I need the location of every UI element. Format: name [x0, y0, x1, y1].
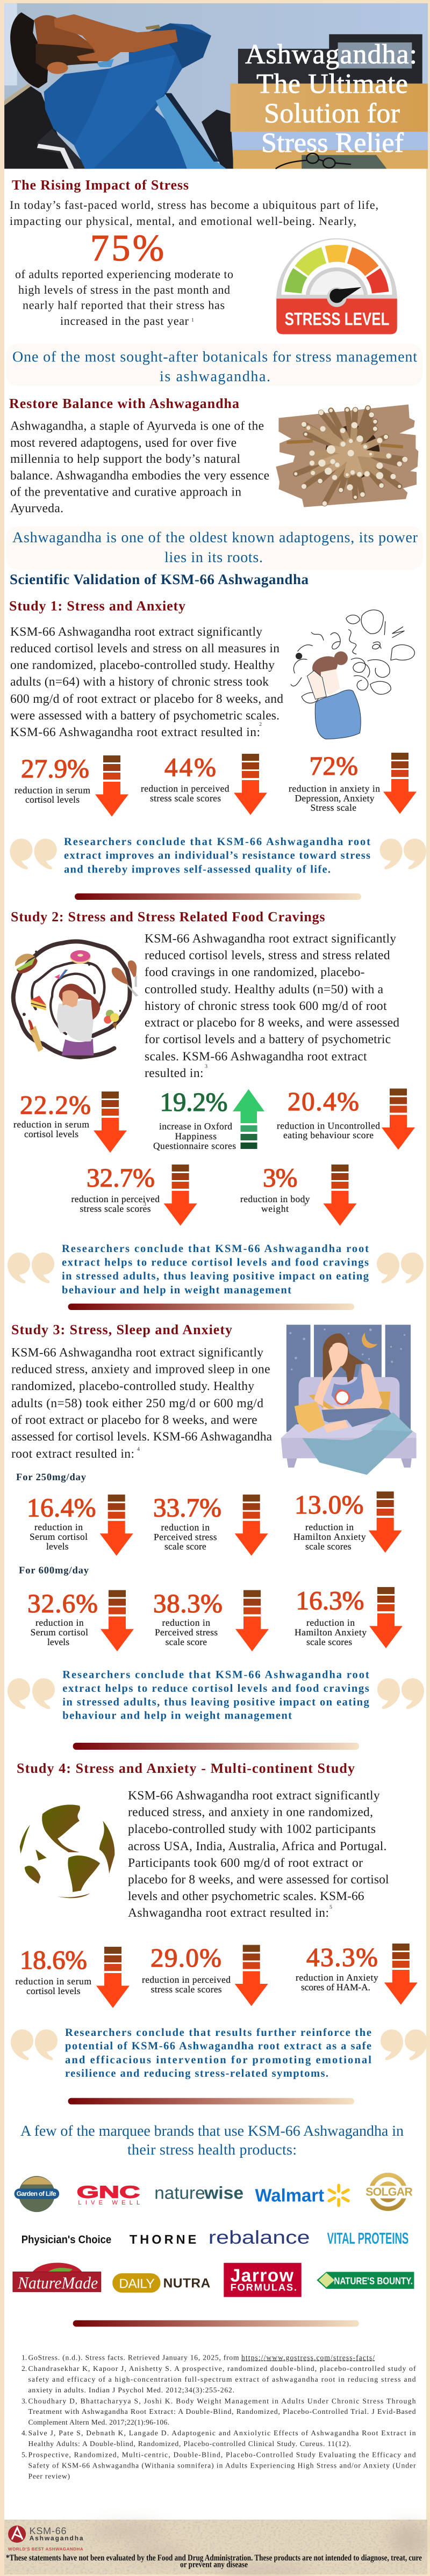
- study 1 text: one randomized, placebo-controlled study. Healthy: [10, 658, 275, 672]
- study 1 text: adults (n=64) with a history of chronic stress took: [10, 675, 269, 689]
- label: reduction in: [306, 1617, 355, 1628]
- label: Perceived stress: [154, 1531, 217, 1542]
- stat: 29.0%: 29.0%: [150, 1943, 221, 1973]
- heading: scientific validation: Scientific Validation of KSM-66 Ashwagandha: [10, 571, 309, 587]
- intro text: In today’s fast-paced world, stress has become a ubiquitous part of life,: [10, 198, 378, 212]
- stat: 16.3%: 16.3%: [296, 1586, 364, 1615]
- quote: study 4 conclusion: potential of KSM-66 Ashwagandha root extract as a safe: [65, 2040, 371, 2052]
- callout: oldest adaptogens: Ashwagandha is one of the oldest known adaptogens, its power: [12, 529, 418, 546]
- stat: 16.3%: [295, 1586, 403, 1648]
- quote: study 3 conclusion: behaviour and help in weight management: [62, 1709, 292, 1721]
- disclaimer: [6, 2553, 422, 2570]
- study 3 text: of root extract or placebo for 8 weeks, and were: [11, 1413, 257, 1427]
- logo: Nature Made: NatureMade: [18, 2274, 98, 2293]
- logo: Solgar: [366, 2175, 413, 2209]
- title: Solution for: [264, 98, 400, 129]
- title: The Ultimate: [256, 69, 408, 99]
- restore balance text: most revered adaptogens, used for over five: [10, 436, 236, 450]
- study 1 text: KSM-66 Ashwagandha root extract resulted in:: [10, 725, 260, 739]
- label: stress scale scores: [80, 1203, 151, 1214]
- label: Serum cortisol: [30, 1531, 88, 1542]
- heading: restore balance: Restore Balance with Ashwagandha: [9, 396, 239, 411]
- logo: GNC: LIVE WELL: [78, 2199, 140, 2206]
- stat description: of adults reported experiencing moderate to: [15, 267, 233, 281]
- restore balance text: of the preventative and curative approach in: [10, 485, 241, 499]
- study 1 text: [10, 625, 283, 739]
- study 3 text: root extract resulted in:: [11, 1447, 134, 1461]
- stat: 38.3%: [153, 1589, 269, 1651]
- heading: study 2: Study 2: Stress and Stress Related Food Cravings: [11, 909, 325, 925]
- quote: study 1 conclusion: [10, 836, 426, 875]
- logo: KSM-66 Ashwagandha: KSM-66: [30, 2526, 67, 2536]
- label: 250 mg/day: For 250mg/day: [16, 1472, 87, 1483]
- label: Hamilton Anxiety: [295, 1627, 367, 1638]
- study 2 text: KSM-66 Ashwagandha root extract significantly: [145, 932, 396, 946]
- restore balance text: millennia to help support the body’s natural: [10, 452, 240, 466]
- title: Stress Relief: [261, 128, 404, 158]
- references: 1.: [22, 2353, 27, 2361]
- icon: down arrow: [384, 1944, 418, 2005]
- label: reduction in: [35, 1617, 84, 1628]
- icon: down arrow: [324, 1165, 357, 1226]
- study 3 text: randomized, placebo-controlled study. Healthy: [11, 1379, 254, 1393]
- study 2 text: for cortisol levels and a battery of psychometric: [145, 1032, 391, 1046]
- references: Complement Altern Med. 2017;22(1):96-106.: [28, 2418, 169, 2426]
- stat: 43.3%: [296, 1942, 418, 2005]
- stat: 13.0%: 13.0%: [295, 1490, 363, 1519]
- study 4 text: levels and other psychometric scales. KSM-66: [128, 1889, 364, 1903]
- stat: 16.4%: 16.4%: [27, 1493, 96, 1523]
- study 1 text: 2: [259, 722, 262, 727]
- logo: Daily Nutra: NUTRA: [163, 2276, 210, 2290]
- quote: study 3 conclusion: Researchers conclude that KSM-66 Ashwagandha root: [62, 1669, 369, 1680]
- heading: marquee brands: their stress health products:: [127, 2142, 297, 2158]
- chicken drumsticks: [112, 967, 128, 985]
- quote: study 3 conclusion: [8, 1669, 424, 1721]
- label: reduction in serum: [13, 1119, 89, 1130]
- study 1 text: 600 mg/d of root extract or placebo for 8 weeks, and: [10, 692, 283, 706]
- references: Safety of KSM-66 Ashwagandha (Withania somnifera) in Adults Experiencing High Stress and/or Anxiety (Under: [28, 2461, 416, 2469]
- logo: naturewise: nature: [154, 2183, 205, 2203]
- quote: study 4 conclusion: and efficacious intervention for promoting emotional: [65, 2054, 371, 2066]
- illustration: sleepless woman in bed: [281, 1325, 417, 1475]
- study 4 text: across USA, India, Australia, Africa and Portugal.: [128, 1839, 386, 1853]
- label: reduction in Anxiety: [296, 1972, 378, 1983]
- quote: study 3 conclusion: extract helps to reduce cortisol levels and food cravings: [62, 1683, 369, 1694]
- stat: 18.6%: [15, 1945, 130, 2008]
- label: [15, 1976, 91, 1996]
- callout: oldest adaptogens: lies in its roots.: [164, 549, 263, 566]
- study 2 text: food cravings in one randomized, placebo-: [145, 965, 364, 979]
- label: levels: [46, 1541, 69, 1552]
- logo: Nature's Bounty: [317, 2272, 414, 2289]
- study 2 text: controlled study. Healthy adults (n=50) with a: [145, 983, 384, 996]
- study 3 text: [11, 1345, 273, 1461]
- label: 3: [303, 1202, 306, 1207]
- label: reduction in: [34, 1522, 83, 1532]
- stat: 20.4%: 20.4%: [288, 1087, 359, 1116]
- logo: Nature's Bounty: NATURE'S BOUNTY.: [334, 2275, 413, 2287]
- references: https://www.gostress.com/stress-facts/: [241, 2353, 375, 2361]
- label: reduction in: [305, 1522, 354, 1532]
- study 2 text: [145, 932, 399, 1080]
- big stat: 75%: 75%: [90, 228, 164, 269]
- quote: study 2 conclusion: behaviour and help in weight management: [62, 1284, 291, 1296]
- study 3 text: KSM-66 Ashwagandha root extract significantly: [11, 1345, 263, 1359]
- label: cortisol levels: [26, 1985, 81, 1996]
- logo: KSM-66 Ashwagandha: Ashwagandha: [30, 2535, 83, 2542]
- stat description: 1: [191, 317, 194, 323]
- study 4 text: [128, 1789, 389, 1920]
- label: increase in Oxford: [159, 1121, 232, 1132]
- label: [71, 1194, 160, 1214]
- label: [293, 1522, 366, 1552]
- study 4 text: placebo-controlled study with 1002 participants: [128, 1822, 376, 1836]
- quote: study 4 conclusion: [11, 2027, 427, 2079]
- label: [154, 1522, 217, 1552]
- references: Chandrasekhar K, Kapoor J, Anishetty S. A prospective, randomized double-blind, placebo-controlled study of: [28, 2364, 416, 2373]
- callout: sought-after botanical: [6, 344, 422, 386]
- stat: 19.2%: 19.2%: [160, 1087, 228, 1117]
- icon: down arrow: [369, 1587, 403, 1648]
- quote: study 3 conclusion: in stressed adults, thus leaving positive impact on eating: [62, 1697, 369, 1708]
- icon: down arrow: [164, 1165, 197, 1226]
- references: [22, 2353, 416, 2480]
- hero photo: stressed man at desk: [4, 3, 428, 169]
- stat: 44%: 44%: [164, 753, 216, 782]
- logo: Garden of Life: Garden of Life: [17, 2190, 56, 2197]
- label: reduction in: [162, 1617, 210, 1628]
- quote: study 4 conclusion: Researchers conclude that results further reinforce the: [65, 2027, 371, 2039]
- logo: Garden of Life: [15, 2176, 59, 2212]
- stat: 27.9%: 27.9%: [21, 754, 89, 783]
- label: cortisol levels: [24, 1129, 78, 1139]
- stat: 3%: 3%: [263, 1163, 298, 1192]
- references: Choudhary D, Bhattacharyya S, Joshi K. Body Weight Management in Adults Under Chronic Stress Through: [28, 2397, 416, 2405]
- logo: Daily Nutra: DAILY: [119, 2276, 155, 2291]
- label: Happiness: [175, 1131, 217, 1141]
- quote: study 4 conclusion: resilience and reducing stress-related symptoms.: [65, 2068, 328, 2079]
- quote: study 2 conclusion: [8, 1243, 424, 1296]
- references: 3.: [22, 2397, 27, 2405]
- quote: study 1 conclusion: Researchers conclude that KSM-66 Ashwagandha root: [64, 836, 370, 848]
- label: cortisol levels: [25, 794, 80, 805]
- references: Peer review): [28, 2472, 70, 2480]
- brand logos: [13, 2175, 414, 2297]
- icon: down arrow: [383, 753, 417, 814]
- label: [15, 785, 90, 805]
- label: [240, 1194, 310, 1214]
- label: reduction in perceived: [71, 1194, 160, 1204]
- references: anxiety in adults. Indian J Psychol Med. 2012;34(3):255-262.: [28, 2386, 234, 2394]
- study 3 text: reduced stress, anxiety and improved sleep in one: [11, 1363, 270, 1377]
- label: [289, 783, 380, 813]
- heading: the rising impact of stress: The Rising Impact of Stress: [12, 177, 189, 193]
- label: reduction in: [161, 1522, 210, 1532]
- illustration: globe: [20, 1804, 114, 1898]
- study 2 text: resulted in:: [145, 1066, 203, 1080]
- stat: 29.0%: [142, 1943, 268, 2006]
- label: Stress scale: [311, 802, 356, 813]
- stat: 18.6%: 18.6%: [20, 1945, 87, 1975]
- heading: marquee brands: A few of the marquee brands that use KSM-66 Ashwagandha in: [20, 2123, 404, 2140]
- logo: naturewise: [154, 2183, 243, 2203]
- logo: Walmart: Walmart: [255, 2185, 324, 2205]
- label: [277, 1120, 380, 1140]
- intro text: [10, 198, 378, 228]
- stat: 32.7%: [71, 1163, 197, 1226]
- study 4 text: placebo for 8 weeks, and were assessed for cortisol: [128, 1873, 389, 1887]
- disclaimer: or prevent any disease: [180, 2560, 248, 2570]
- icon: down arrow: [235, 1495, 268, 1556]
- study 3 text: 4: [137, 1446, 140, 1452]
- label: stress scale scores: [150, 792, 221, 803]
- quote: study 2 conclusion: Researchers conclude that KSM-66 Ashwagandha root: [62, 1243, 369, 1255]
- label: reduction in Uncontrolled: [277, 1120, 380, 1131]
- restore balance text: balance. Ashwagandha embodies the very essence: [10, 469, 269, 483]
- stat description: increased in the past year: [60, 314, 189, 328]
- label: [153, 1121, 236, 1151]
- label: Serum cortisol: [31, 1627, 88, 1638]
- logo: Nature Made: [13, 2263, 101, 2293]
- study 1 text: were assessed with a battery of psychometric scales.: [10, 709, 280, 723]
- hero banner: [4, 3, 428, 169]
- restore balance text: Ashwagandha, a staple of Ayurveda is one of the: [10, 419, 264, 433]
- label: levels: [47, 1636, 69, 1647]
- label: scale scores: [305, 1541, 352, 1552]
- quote: study 2 conclusion: extract helps to reduce cortisol levels and food cravings: [62, 1257, 369, 1269]
- heading: study 4: Study 4: Stress and Anxiety - Multi-continent Study: [17, 1760, 355, 1776]
- icon: down arrow: [369, 1491, 402, 1553]
- study 1 text: reduced cortisol levels and stress on all measures in: [10, 642, 280, 656]
- logo: Physician's Choice: Physician's Choice: [22, 2233, 111, 2246]
- woman: [62, 1038, 94, 1056]
- hot dog: [29, 1026, 43, 1052]
- references: GoStress. (n.d.). Stress facts. Retrieved January 16, 2025, from: [28, 2353, 239, 2361]
- study 2 text: extract or placebo for 8 weeks, and were assessed: [145, 1016, 399, 1030]
- stat: 32.6%: 32.6%: [27, 1589, 98, 1618]
- label: scale score: [166, 1636, 207, 1647]
- callout: sought-after botanical: is ashwagandha.: [160, 368, 270, 385]
- study 2 text: 3: [205, 1064, 207, 1069]
- restore balance text: [10, 419, 269, 515]
- stat: 32.6%: [27, 1589, 134, 1651]
- label: [142, 1974, 231, 1995]
- heading: marquee brands: [20, 2123, 404, 2158]
- study 2 text: history of chronic stress took 600 mg/d of root: [145, 999, 387, 1013]
- label: reduction in body: [240, 1194, 310, 1204]
- icon: down arrow: [94, 1091, 127, 1153]
- stat description: [15, 267, 233, 328]
- logo: Jarrow Formulas: [224, 2263, 302, 2297]
- references: 2.: [22, 2364, 27, 2373]
- stat: 16.4%: [27, 1493, 133, 1556]
- icon: down arrow: [235, 1945, 268, 2006]
- icon: down arrow: [100, 1495, 133, 1556]
- references: Healthy Adults: A Double-blind, Randomized, Placebo-controlled Clinical Study. Cureus. 11(12).: [28, 2440, 351, 2448]
- intro text: impacting our physical, mental, and emotional well-being. Nearly,: [10, 214, 356, 228]
- label: [141, 783, 230, 803]
- illustration: woman in food spiral: [13, 941, 138, 1057]
- label: reduction in serum: [15, 785, 90, 796]
- stat: 13.0%: [293, 1490, 402, 1553]
- restore balance text: Ayurveda.: [10, 501, 63, 515]
- label: 600 mg/day: For 600mg/day: [19, 1566, 89, 1576]
- references: Prospective, Randomized, Multi-centric, Double-Blind, Placebo-Controlled Study Evaluating the Efficacy and: [28, 2451, 416, 2459]
- stat: 19.2%: [153, 1087, 264, 1151]
- references: safety and efficacy of a high-concentration full-spectrum extract of ashwagandha root in reducing stress and: [28, 2375, 416, 2383]
- quote: study 2 conclusion: in stressed adults, thus leaving positive impact on eating: [62, 1270, 369, 1282]
- study 2 text: reduced cortisol levels, stress and stress related: [145, 949, 390, 963]
- stat: 72%: 72%: [310, 751, 358, 781]
- icon: stress level gauge: [276, 238, 397, 334]
- references: Salve J, Pate S, Debnath K, Langade D. Adaptogenic and Anxiolytic Effects of Ashwagandha Root Extract in: [28, 2429, 416, 2437]
- icon: down arrow: [96, 1947, 130, 2008]
- logo: Daily Nutra: [112, 2273, 210, 2293]
- label: reduction in perceived: [142, 1974, 231, 1985]
- icon: down arrow: [95, 755, 128, 817]
- stat: 33.7%: 33.7%: [153, 1493, 221, 1523]
- stat description: high levels of stress in the past month and: [18, 283, 230, 296]
- logo: KSM-66 Ashwagandha: [8, 2526, 83, 2552]
- heading: study 1: Study 1: Stress and Anxiety: [9, 598, 185, 614]
- icon: down arrow: [234, 754, 267, 815]
- stat: 38.3%: 38.3%: [153, 1589, 223, 1618]
- stat description: nearly half reported that their stress has: [23, 299, 225, 311]
- label: [296, 1972, 378, 1992]
- logo: Thorne: THORNE: [130, 2232, 196, 2246]
- study 1 text: KSM-66 Ashwagandha root extract significantly: [10, 625, 262, 639]
- stat: 72%: [289, 751, 417, 814]
- logo: KSM-66 Ashwagandha: WORLD'S BEST ASHWAGANDHA: [8, 2547, 83, 2552]
- label: eating behaviour score: [283, 1130, 374, 1140]
- stat: 22.2%: [13, 1090, 127, 1153]
- stat: 33.7%: [153, 1493, 268, 1556]
- label: reduction in anxiety in: [289, 783, 380, 794]
- cake: [31, 996, 46, 1010]
- label: 3: [144, 1202, 146, 1207]
- logo: naturewise: wise: [204, 2183, 243, 2203]
- illustration: overwhelmed woman with doodles: [291, 610, 414, 739]
- icon: down arrow: [235, 1590, 269, 1651]
- label: weight: [261, 1203, 289, 1214]
- logo: Solgar: SOLGAR: [366, 2185, 413, 2198]
- stat: 44%: [141, 753, 267, 815]
- ice cream: [106, 1010, 114, 1018]
- references: 4.: [22, 2429, 27, 2437]
- logo: GNC: GNC: [77, 2183, 140, 2202]
- label: scale score: [164, 1541, 206, 1552]
- image: ashwagandha roots: [276, 404, 418, 507]
- logo: GNC: [77, 2183, 140, 2206]
- label: stress scale scores: [151, 1984, 222, 1995]
- study 2 text: scales. KSM-66 Ashwagandha root extract: [145, 1050, 367, 1064]
- footer: [4, 2520, 427, 2576]
- stat: 22.2%: 22.2%: [20, 1090, 91, 1120]
- icon: up arrow: [233, 1089, 264, 1149]
- donut: [70, 950, 91, 964]
- label: Perceived stress: [155, 1627, 218, 1638]
- label: Questionnaire scores: [153, 1140, 236, 1151]
- quote: study 1 conclusion: and thereby improves self-assessed quality of life.: [64, 863, 331, 875]
- callout: sought-after botanical: One of the most sought-after botanicals for stress management: [12, 349, 417, 365]
- icon: down arrow: [101, 1590, 134, 1651]
- title: [245, 39, 417, 158]
- references: Treatment with Ashwagandha Root Extract: A Double-Blind, Randomized, Placebo-Controlled Trial. J Evid-Based: [28, 2407, 416, 2415]
- gauge label: STRESS LEVEL: [285, 309, 389, 329]
- callout: oldest adaptogens: [6, 526, 423, 570]
- stat: 43.3%: 43.3%: [306, 1942, 378, 1972]
- label: [30, 1522, 88, 1552]
- logo: Jarrow Formulas: Jarrow: [231, 2265, 293, 2285]
- stat: 3%: [240, 1163, 357, 1226]
- study 4 text: Participants took 600 mg/d of root extract or: [128, 1856, 363, 1870]
- label: scale scores: [306, 1636, 352, 1647]
- logo: Jarrow Formulas: FORMULAS.: [231, 2282, 297, 2293]
- title: Ashwagandha:: [245, 39, 417, 70]
- icon: down arrow: [382, 1089, 415, 1150]
- stat: 20.4%: [277, 1087, 415, 1150]
- label: [13, 1119, 89, 1139]
- label: reduction in perceived: [141, 783, 230, 794]
- label: reduction in serum: [15, 1976, 91, 1986]
- label: [155, 1617, 218, 1647]
- quote: study 1 conclusion: extract improves an individual’s resistance toward stress: [64, 849, 370, 861]
- label: [295, 1617, 367, 1647]
- study 4 text: 5: [329, 1904, 332, 1910]
- study 4 text: KSM-66 Ashwagandha root extract significantly: [128, 1789, 380, 1803]
- study 4 text: reduced stress, and anxiety in one randomized,: [128, 1806, 373, 1820]
- references: 5.: [22, 2451, 27, 2459]
- logo: rebalance: rebalance: [209, 2227, 310, 2248]
- stat: 27.9%: [15, 754, 128, 817]
- label: Hamilton Anxiety: [293, 1531, 366, 1542]
- study 3 text: assessed for cortisol levels. KSM-66 Ashwagandha: [11, 1430, 273, 1444]
- candy: [54, 970, 68, 980]
- label: [31, 1617, 88, 1647]
- stat: 32.7%: 32.7%: [87, 1163, 155, 1192]
- label: Depression, Anxiety: [295, 792, 375, 803]
- burger: [15, 954, 38, 973]
- study 3 text: adults (n=58) took either 250 mg/d or 600 mg/d: [11, 1396, 263, 1410]
- study 4 text: Ashwagandha root extract resulted in:: [128, 1906, 329, 1920]
- heading: study 3: Study 3: Stress, Sleep and Anxiety: [11, 1322, 232, 1337]
- label: scores of HAM-A.: [301, 1982, 370, 1992]
